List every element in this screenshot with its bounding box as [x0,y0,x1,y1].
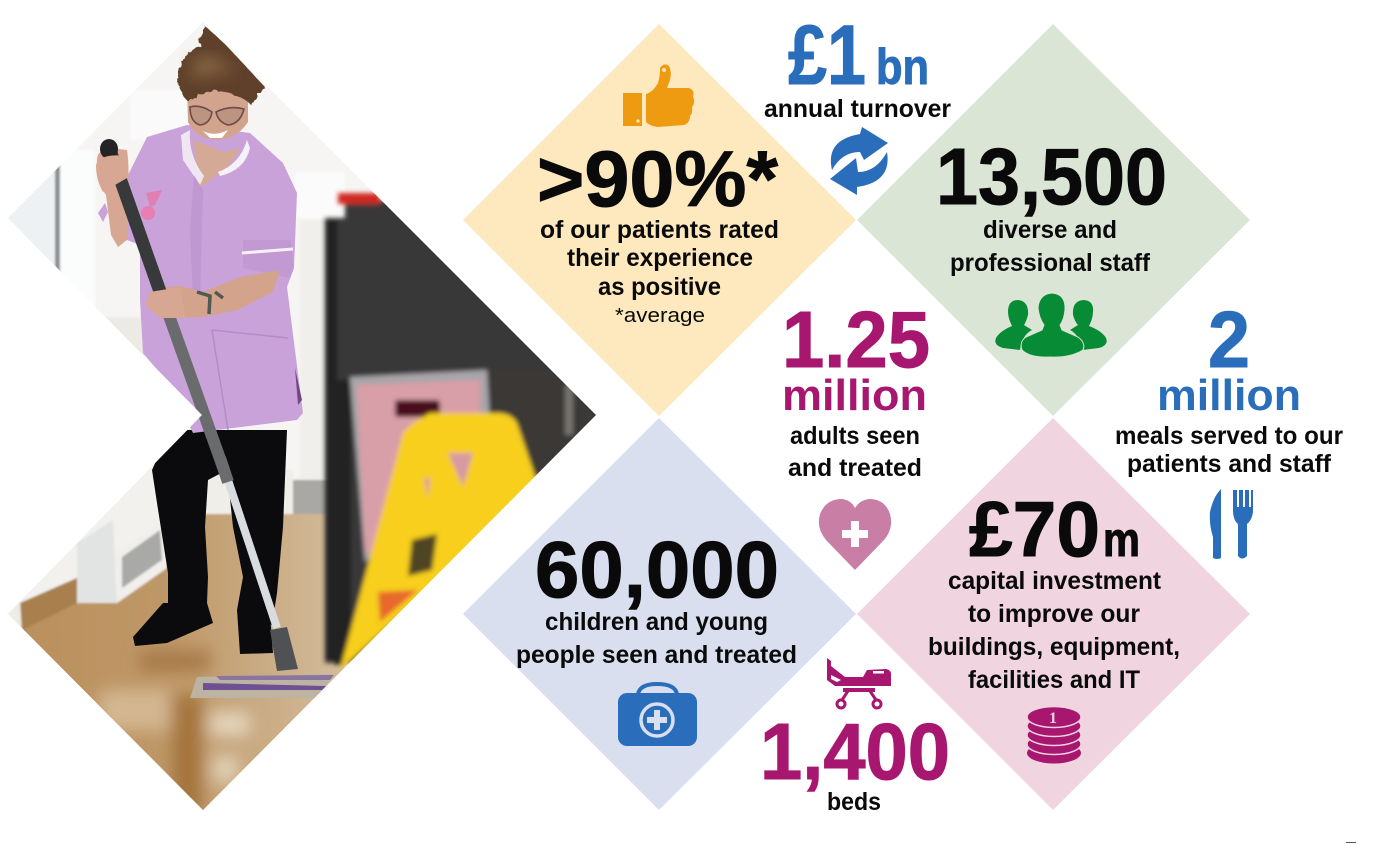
stat: staff: diverse and [983,216,1117,244]
stat: adults seen and treated: 1.25 [782,295,930,384]
icon: knife and fork [1210,489,1253,559]
stat: adults seen and treated: adults seen [790,422,920,450]
stat: patient experience: of our patients rated [540,216,779,244]
stat: children and young people: children and young [545,608,768,636]
stat: children and young people: 60,000 [535,525,779,614]
stat: meals served: meals served to our [1115,422,1343,450]
stat: patient experience: as positive [598,273,721,301]
stat: patient experience: *average [615,305,705,327]
stat: capital investment: capital investment [948,567,1162,595]
icon: circular arrows [830,127,888,195]
stat: adults seen and treated: and treated [788,454,922,482]
head and hair [178,26,264,140]
diamond: children and young people (lilac) [463,418,856,810]
stat: staff: professional staff [950,249,1151,277]
stat: staff [936,132,1167,277]
diamond: patient experience (yellow) [463,24,856,416]
icon: stack of coins: 1 [1049,710,1057,727]
legs [133,430,287,654]
stat: adults seen and treated [782,295,930,482]
background: window, wall, radiator and floor [8,152,346,810]
stat: children and young people: people seen and treated [516,641,797,669]
icon: group of people [995,293,1107,357]
stat: capital investment: facilities and IT [968,666,1140,694]
icon: heart with cross [819,499,891,570]
stat: capital investment: m [1103,514,1140,567]
hands gripping handle [96,155,186,318]
photo: cleaner mopping the floor, in chevron shape [0,0,605,824]
stat: annual turnover: £1 [788,8,866,102]
stat: meals served: patients and staff [1127,450,1332,478]
stat: patient experience [537,134,779,327]
floor reflections [100,650,250,815]
stat: meals served [1115,295,1343,478]
stat: meals served: million [1157,371,1301,420]
icon: stack of coins [1027,706,1081,764]
stat: annual turnover [764,8,951,123]
arms and hands [97,148,280,318]
icon: hospital bed [827,658,891,708]
icon: medical bag [618,684,697,746]
mop handle [100,139,298,671]
tunic [98,125,303,433]
stat: capital investment: buildings, equipment, [928,633,1180,661]
icon: thumbs up [623,64,694,127]
stat: children and young people [516,525,797,669]
stat: capital investment [928,485,1180,694]
background: dark cabinet, sign and wet floor cone [325,193,605,670]
diamond: staff (green) [857,24,1250,416]
mop pad [190,674,334,698]
stat: patient experience: >90%* [537,134,778,223]
stat: annual turnover: annual turnover [764,95,951,123]
stat: patient experience: their experience [567,244,753,272]
diamond: capital investment (pink) [857,418,1250,810]
stat: staff: 13,500 [936,132,1167,221]
stat: capital investment: £70 [969,485,1100,573]
stat: annual turnover: bn [876,39,929,95]
stat: beds: 1,400 [760,707,950,796]
stat: meals served: 2 [1208,295,1250,384]
stat: adults seen and treated: million [782,371,927,420]
stat: beds: beds [827,788,881,816]
stat: capital investment: to improve our [968,600,1140,628]
